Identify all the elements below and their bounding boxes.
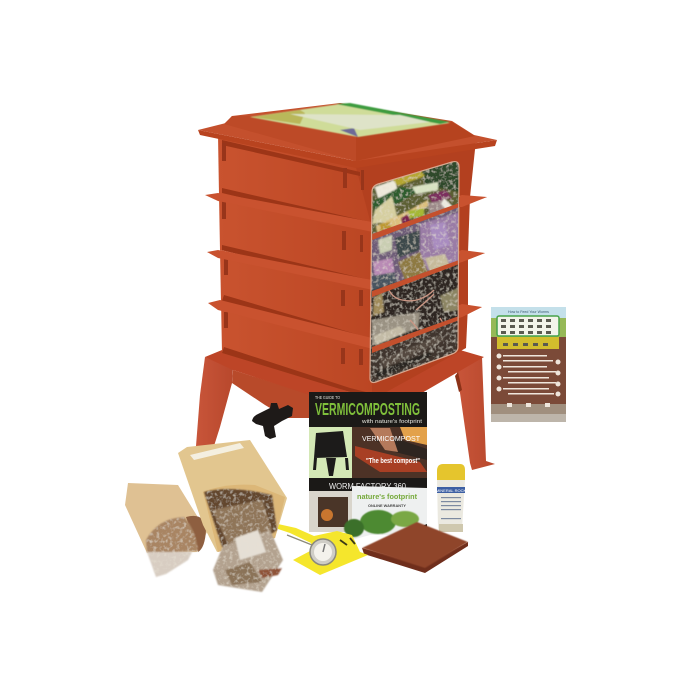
left paper bag of bedding: [125, 483, 207, 577]
tier 2 wall: [219, 195, 372, 285]
right paper bag of shredded bedding: [178, 440, 287, 592]
layer: finished compost: [370, 320, 458, 382]
layer: decomposing leaves: [372, 208, 458, 292]
tier slots: [222, 143, 364, 365]
mineral rock dust bottle: [436, 464, 466, 532]
book title: VERMICOMPOSTING: [315, 399, 420, 419]
book title: with nature's footprint: [361, 419, 423, 425]
book title: THE GUIDE TO: [315, 395, 340, 400]
warranty card: [344, 486, 427, 540]
lid: [198, 103, 497, 168]
window outline: [370, 162, 459, 382]
thermometer and yellow holder: [278, 524, 368, 575]
information poster: [491, 307, 566, 422]
book title: [315, 395, 423, 425]
tier 3 wall: [220, 250, 372, 342]
poster icon grid: [501, 319, 551, 346]
book photo: green bin: [309, 427, 352, 478]
coir brick: [362, 522, 468, 573]
composting bin: [196, 103, 497, 470]
layer: worm castings: [370, 264, 458, 348]
bottle label text: MINERAL ROCK: [436, 488, 466, 493]
right rim stubs: [459, 197, 487, 317]
rim shadows: [222, 140, 374, 392]
window dividers: [372, 202, 462, 353]
worms: [388, 290, 443, 330]
warranty subheading: ONLINE WARRANTY: [368, 504, 406, 508]
book photo: compost hands: "The best compost": [366, 456, 420, 465]
book photo: food scraps: [309, 491, 352, 532]
stand and legs: [196, 350, 495, 470]
layer: fresh food scraps: [372, 162, 458, 234]
poster guide rows: [496, 354, 560, 407]
poster title: How to Feed Your Worms: [508, 310, 549, 314]
tier 1 wall: [218, 135, 372, 228]
book photo: compost hands: VERMICOMPOST: [362, 434, 420, 443]
book photo: compost hands: [352, 427, 427, 478]
viewing window with cross-section: [368, 160, 462, 386]
guide book: [309, 392, 427, 532]
bottle label lines: [441, 497, 461, 519]
warranty heading: nature's footprint: [357, 494, 418, 501]
rims: [205, 193, 487, 349]
tier 4 wall: [221, 300, 372, 400]
book band: WORM FACTORY 360: [329, 482, 407, 491]
herbs: [344, 510, 419, 537]
icon: spigot tap: [252, 403, 293, 439]
